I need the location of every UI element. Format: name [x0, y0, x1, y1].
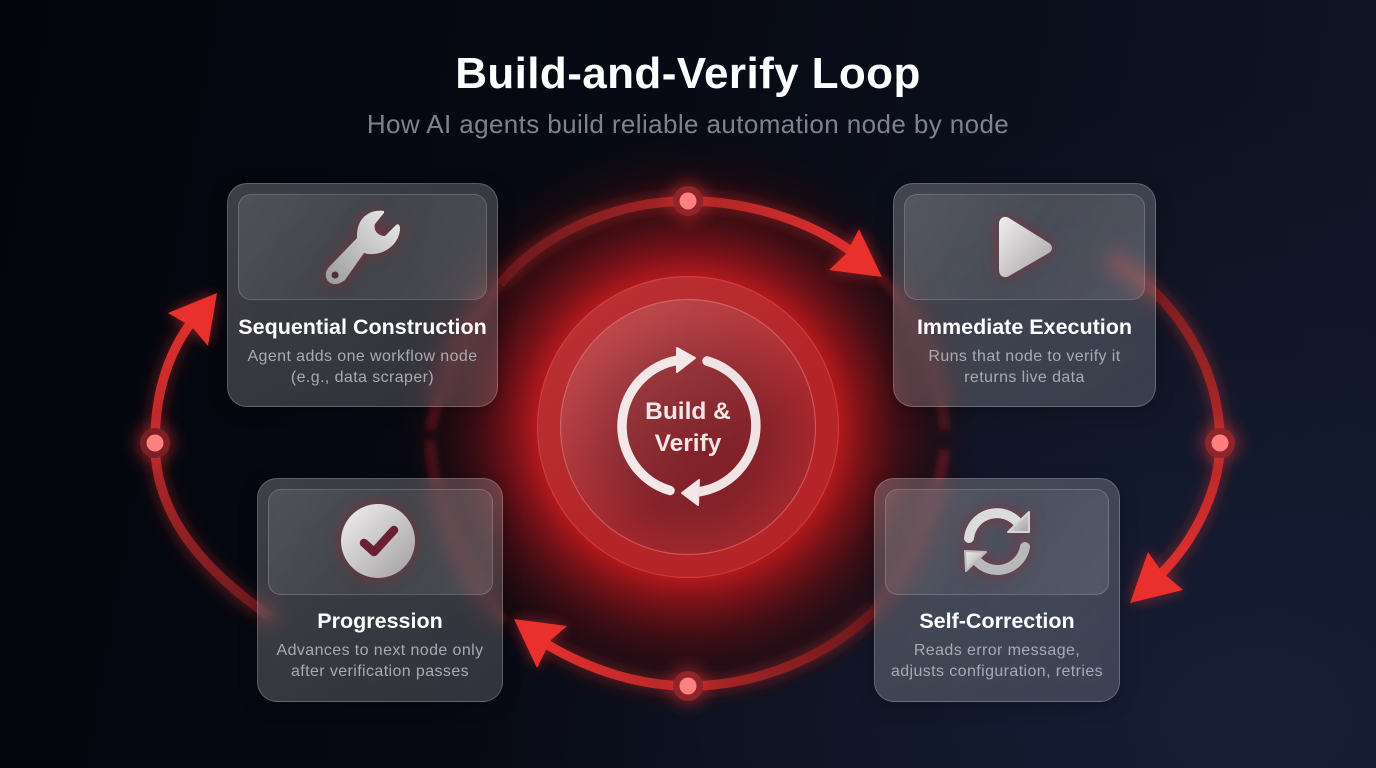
description: [247, 348, 478, 386]
icon: wrench: [320, 206, 404, 289]
panel: Immediate Execution: [893, 183, 1156, 407]
icon panel: wrench: [238, 194, 486, 300]
icon: check mark: [334, 498, 422, 584]
subtitle: How AI agents build reliable automation node by node: [367, 109, 1009, 139]
description: adjusts configuration, retries: [891, 663, 1103, 680]
icon: circular arrows around hub label: [622, 348, 756, 505]
description: [891, 642, 1103, 680]
description: (e.g., data scraper): [291, 369, 434, 386]
description: Runs that node to verify it: [928, 348, 1121, 365]
title: Build-and-Verify Loop: [455, 49, 921, 98]
icon panel: play: [904, 194, 1144, 300]
description: Agent adds one workflow node: [247, 348, 478, 365]
description: Advances to next node only: [276, 642, 483, 659]
node: right: [1199, 422, 1241, 464]
arrow: right arc: [1110, 258, 1220, 603]
description: after verification passes: [291, 663, 469, 680]
central hub discs: [538, 276, 838, 578]
description: [276, 642, 483, 680]
heading: Sequential Construction: [238, 314, 487, 338]
node: bottom: [667, 665, 709, 707]
arrow: top arc: [500, 201, 882, 284]
panel: Progression: [257, 478, 503, 702]
heading: Immediate Execution: [917, 314, 1132, 338]
node: left: [134, 422, 176, 464]
icon: sync arrows: [958, 502, 1036, 581]
description: returns live data: [964, 369, 1085, 386]
hub label: Build &: [645, 398, 731, 425]
description: [928, 348, 1121, 386]
panel: Sequential Construction: [227, 183, 498, 407]
hub label: [645, 398, 731, 456]
panel: Self-Correction: [874, 478, 1120, 702]
central red glow: [398, 137, 978, 717]
icon panel: sync: [884, 488, 1108, 595]
arrow: left arc: [155, 293, 275, 620]
icon: play: [992, 212, 1056, 282]
hub label: Verify: [655, 430, 721, 456]
description: Reads error message,: [914, 642, 1080, 659]
heading: Progression: [317, 608, 443, 632]
heading: Self-Correction: [919, 608, 1075, 632]
node: top: [667, 180, 709, 222]
icon panel: check: [268, 488, 492, 595]
arrow: bottom arc: [514, 610, 875, 686]
